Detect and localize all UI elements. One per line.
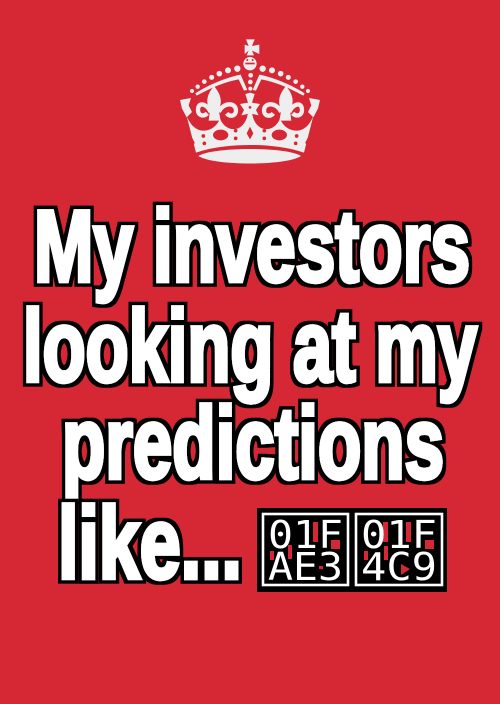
glyph box 1: AE3 [268, 545, 343, 589]
icon: crown [180, 39, 320, 163]
glyph box 1 [263, 513, 348, 589]
missing-glyph emoji boxes [257, 508, 447, 592]
title text [23, 191, 477, 600]
glyph box 2: 4C9 [361, 545, 437, 589]
glyph box 2: 01F [361, 513, 437, 557]
glyph box 2 [356, 513, 442, 589]
title line 4: like... [58, 488, 242, 600]
glyph box 1: 01F [268, 513, 343, 557]
